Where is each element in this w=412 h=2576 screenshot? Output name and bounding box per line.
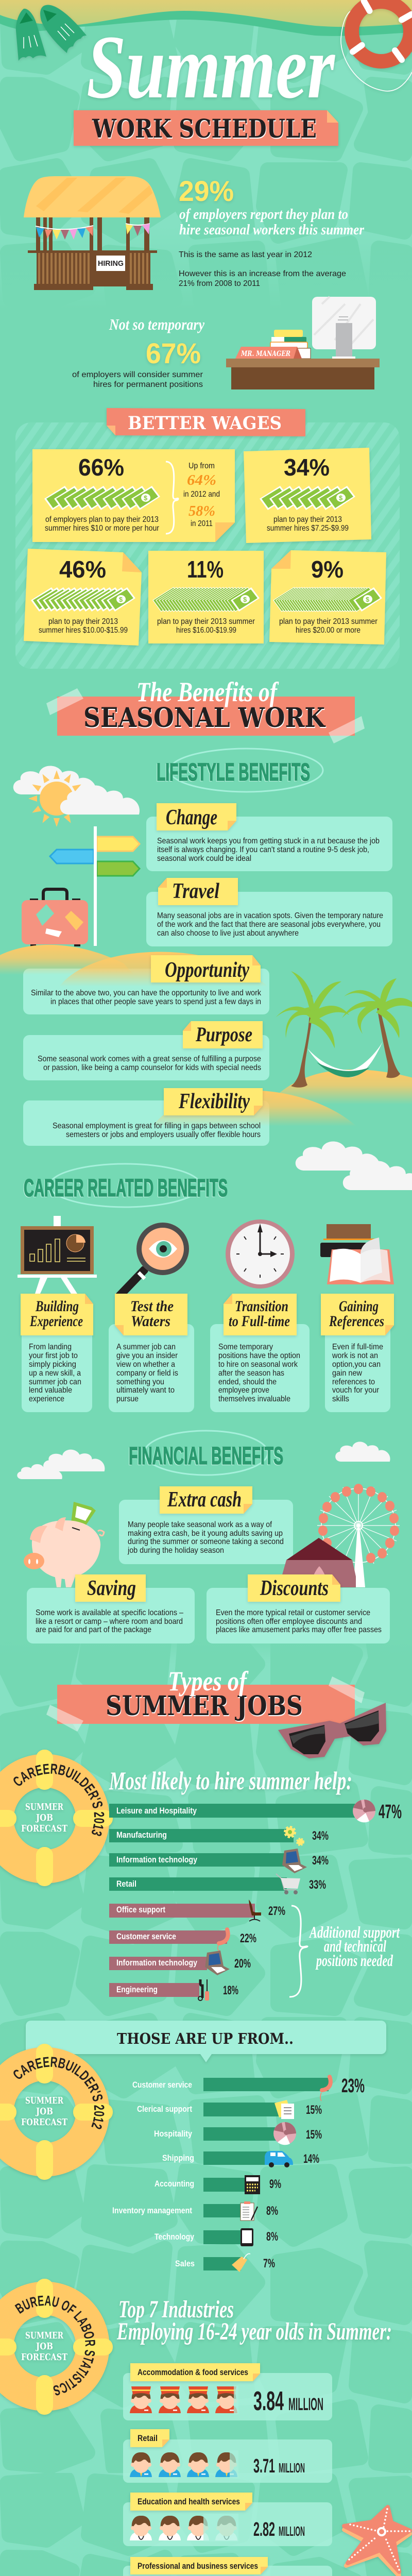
top sand shore [0, 0, 412, 36]
banner: work schedule: WORK SCHEDULE [92, 113, 317, 144]
scribble behind wages [15, 422, 400, 669]
heading: top 7 industries [116, 2296, 392, 2345]
panel: discounts [207, 1574, 390, 1643]
bar: accounting: 9% [269, 2177, 281, 2191]
panel: saving: Saving [87, 1577, 136, 1600]
stat: 29 percent: hire seasonal workers this summer [179, 222, 365, 238]
forecast ring: careerbuilder 2013: SUMMER [25, 1802, 64, 1812]
bar: technology: Technology [154, 2232, 194, 2242]
panel: travel: can also choose to live just about anywhere [157, 929, 299, 938]
panel: building experience: lend valuable [29, 1386, 72, 1395]
note: 66 percent [32, 449, 235, 542]
note: 66 percent: 64% [187, 472, 216, 488]
bar: engineering: Engineering [116, 1985, 158, 1994]
banner: types of summer jobs [46, 1666, 365, 1732]
note: 46 percent [24, 549, 142, 646]
industry: professional [123, 2557, 332, 2576]
panel: transition to full-time [210, 1294, 310, 1412]
banner: types of summer jobs: SUMMER JOBS [106, 1690, 303, 1722]
industry: education: MILLION [279, 2523, 305, 2539]
bar: sales: Sales [175, 2259, 195, 2268]
banner: types of summer jobs: Types of [168, 1666, 249, 1697]
panel: gaining references: gain new [332, 1369, 362, 1378]
bar: information technology: 34% [312, 1854, 329, 1868]
note: 66 percent: in 2012 and [183, 490, 220, 499]
industry: accommodation: Accommodation & food services [138, 2367, 248, 2377]
icon: palm trees and hammock [276, 971, 412, 1088]
note: 34 percent: 34% [284, 454, 330, 481]
icon: life ring top [341, 1, 412, 91]
industry: accommodation [123, 2363, 332, 2420]
industry: accommodation: 3.84 [253, 2386, 284, 2416]
bar: engineering: 18% [223, 1984, 238, 1997]
forecast ring: careerbuilder 2013 [0, 1750, 113, 1888]
bar: information technology [109, 1849, 329, 1873]
panel: travel [146, 878, 392, 946]
banner: benefits of seasonal work [46, 676, 365, 743]
heading: financial benefits [128, 1431, 283, 1475]
bar: inventory management: 8% [266, 2204, 278, 2218]
forecast ring: careerbuilder 2012: JOB [35, 2106, 53, 2117]
industry: retail: Retail [138, 2433, 158, 2443]
forecast ring: careerbuilder 2013: JOB [35, 1812, 53, 1823]
bar: clerical support [137, 2100, 322, 2119]
forecast ring: bureau of labor statistics: BUREAU OF LABOR STATISTICS [14, 2296, 95, 2396]
panel: discounts: Even the more typical retail or customer service [216, 1608, 370, 1617]
text: flexibility: Seasonal employment is great for filling in gaps between school [53, 1122, 261, 1130]
sand mounds lifestyle [0, 945, 412, 1126]
note: 66 percent: summer hires $10 or more per hour [45, 524, 160, 533]
bar: sales [175, 2253, 275, 2272]
money stack 11 [153, 587, 260, 612]
panel: travel: Many seasonal jobs are in vacation spots. Given the temporary nature [157, 911, 383, 920]
panel: extra cash: job during the holiday season [127, 1546, 224, 1555]
bar: technology: 8% [266, 2230, 278, 2244]
icon: circus tent [282, 1538, 356, 1587]
bar: information technology 20: 20% [234, 1957, 251, 1971]
panel: building experience: Building [35, 1298, 79, 1315]
callout: additional support [289, 1906, 400, 1997]
note: 9 percent: hires $20.00 or more [296, 626, 360, 635]
panel: transition to full-time: positions have the option [218, 1351, 300, 1360]
icon: piggy bank [24, 1502, 104, 1587]
bar: retail: Retail [116, 1879, 136, 1889]
panel: change: Change [166, 806, 217, 829]
panel: transition to full-time: Transition [235, 1298, 288, 1315]
banner: benefits of seasonal work: SEASONAL WORK [83, 702, 326, 734]
panel: test the waters [109, 1294, 194, 1412]
bar: customer service [109, 1929, 256, 1951]
panel: test the waters: A summer job can [116, 1343, 176, 1351]
icon: magnifier with eye [119, 1223, 189, 1296]
icon: flippers [16, 5, 87, 61]
text: purpose: Some seasonal work comes with a great sense of fulfilling a purpose [38, 1055, 261, 1063]
icon: books [320, 1224, 394, 1284]
bar: information technology: Information technology [116, 1855, 197, 1865]
icon: starfish [344, 2507, 410, 2576]
panel: building experience: your first job to [29, 1351, 78, 1360]
industry: education: Education and health services [138, 2497, 240, 2506]
icon: clouds right [296, 1142, 412, 1190]
forecast ring: careerbuilder 2012 [0, 2044, 113, 2181]
bar: information technology 20: Information technology [116, 1958, 197, 1968]
panel: gaining references: Even if full-time [332, 1343, 383, 1351]
forecast ring: careerbuilder 2013: FORECAST [21, 1823, 67, 1834]
panel: change [146, 803, 392, 871]
panel: gaining references: option,you can [332, 1360, 381, 1369]
note: 11 percent [148, 551, 264, 643]
heading: top 7 industries: Top 7 Industries [118, 2296, 234, 2323]
money stack 46 [31, 587, 135, 612]
stat: 67 percent not so temporary: hires for permanent positions [93, 380, 203, 389]
bar: hospitality [154, 2122, 322, 2145]
bar: accounting [154, 2175, 281, 2194]
icon: signpost [50, 826, 140, 946]
panel: change: Seasonal work keeps you from getting stuck in a rut because the job [157, 837, 380, 845]
stat: 29 percent: 21% from 2008 to 2011 [179, 279, 260, 288]
bar: customer service: Customer service [116, 1931, 176, 1941]
forecast ring: bureau of labor statistics: JOB [35, 2341, 53, 2352]
panel: gaining references: Gaining [339, 1298, 379, 1315]
banner: work schedule: WORK SCHEDULE [92, 114, 317, 145]
heading: career related benefits: CAREER RELATED BENEFITS [23, 1175, 227, 1202]
panel: transition to full-time: Some temporary [218, 1343, 273, 1351]
text: flexibility: semesters or jobs and employers usually offer flexible hours [66, 1130, 261, 1139]
icon: hiring hut [24, 176, 161, 290]
panel: extra cash: Many people take seasonal work as a way of [128, 1520, 272, 1529]
note: 46 percent: summer hires $10.00-$15.99 [39, 626, 128, 635]
panel: test the waters: something you [116, 1378, 164, 1386]
note: 46 percent: plan to pay their 2013 [48, 617, 118, 626]
stat: 29 percent: of employers report they plan to [179, 206, 348, 223]
bar: retail [109, 1874, 326, 1894]
text: flexibility: Flexibility [178, 1090, 250, 1113]
note: 9 percent [269, 550, 386, 645]
bar: sales: 7% [263, 2257, 275, 2270]
bar: customer service 23: Customer service [132, 2080, 192, 2090]
heading: career related benefits: CAREER RELATED BENEFITS [24, 1175, 228, 1202]
bar: clerical support: Clerical support [137, 2104, 192, 2114]
panel: change: seasonal work could be ideal [157, 854, 251, 863]
note: 46 percent: 46% [59, 556, 106, 583]
panel: extra cash: during the summer or someone taking a second [128, 1537, 284, 1546]
panel: building experience: From landing [29, 1343, 72, 1351]
industry: retail [123, 2429, 332, 2483]
note: 9 percent: plan to pay their 2013 summer [279, 617, 378, 626]
money stack 66 [44, 486, 160, 510]
heading: lifestyle benefits [156, 749, 323, 792]
panel: building experience: up a new skill, a [29, 1369, 81, 1378]
note: 66 percent: of employers plan to pay their 2013 [45, 515, 159, 524]
industry: retail: MILLION [279, 2460, 305, 2476]
panel: extra cash: making extra cash, be it young adults saving up [128, 1529, 283, 1538]
heading: financial benefits: FINANCIAL BENEFITS [128, 1443, 283, 1470]
note: 11 percent: hires $16.00-$19.99 [176, 626, 236, 635]
icon: chalkboard [18, 1216, 97, 1294]
panel: test the waters: pursue [116, 1395, 139, 1403]
text: purpose: or passion, like being a camp counselor for kids with special needs [43, 1063, 261, 1072]
bar: shipping: Shipping [162, 2153, 194, 2163]
icon: hiring hut: HIRING [98, 259, 124, 268]
bar: hospitality: 15% [306, 2128, 322, 2142]
text: purpose: Purpose [195, 1023, 252, 1046]
bar: inventory management: Inventory management [112, 2206, 192, 2215]
bar: customer service 23 [132, 2075, 365, 2101]
forecast ring: bureau of labor statistics: FORECAST [21, 2352, 67, 2363]
panel: transition to full-time: employee prove [218, 1386, 269, 1395]
panel: saving [27, 1574, 195, 1643]
banner: better wages: BETTER WAGES [128, 413, 282, 434]
bar: office support: Office support [116, 1905, 165, 1914]
stat: 29 percent [179, 175, 365, 288]
icon: suitcase [22, 889, 88, 946]
icon: manager desk [226, 297, 380, 389]
panel: gaining references: skills [332, 1395, 349, 1403]
panel: test the waters: view on whether a [116, 1360, 175, 1369]
banner: benefits of seasonal work: The Benefits of [136, 676, 279, 707]
bar: hospitality: Hospitality [154, 2129, 192, 2139]
panel: test the waters: company or field is [116, 1369, 178, 1378]
callout bubble: those are up from [26, 2021, 386, 2062]
title: Summer: Summer [87, 17, 335, 117]
industry: education: 2.82 [253, 2519, 275, 2540]
bar: technology [154, 2228, 278, 2246]
text: opportunity: in places that other people save years to spend just a few days in [50, 997, 261, 1006]
stat: 29 percent: 29% [179, 175, 234, 207]
text: opportunity: Similar to the above two, you can have the opportunity to live and work [31, 989, 262, 997]
money stack 34 [260, 486, 355, 510]
heading: financial benefits: FINANCIAL BENEFITS [129, 1443, 283, 1470]
money stack 9 [273, 587, 382, 612]
panel: transition to full-time: themselves invaluable [218, 1395, 290, 1403]
forecast ring: careerbuilder 2013: CAREERBUILDER'S 2013 [13, 1764, 104, 1836]
panel: discounts: places like amusement parks may offer free passes [216, 1625, 382, 1634]
bar: office support [109, 1900, 285, 1921]
banner: better wages [107, 408, 305, 436]
panel: flexibility [23, 1100, 269, 1146]
panel: saving: like a resort or camp – where room and board [36, 1617, 183, 1626]
industry: professional: Professional and business services [138, 2561, 258, 2571]
bar: manufacturing [109, 1827, 329, 1845]
industry: education [123, 2493, 332, 2546]
forecast ring: careerbuilder 2012: SUMMER [25, 2095, 64, 2106]
heading: lifestyle benefits: LIFESTYLE BENEFITS [156, 759, 310, 787]
stat: 67 percent not so temporary: of employers will consider summer [72, 370, 203, 379]
note: 34 percent [244, 448, 371, 543]
industry: accommodation: MILLION [288, 2395, 323, 2414]
industry: retail: 3.71 [253, 2455, 275, 2477]
bar: accounting: Accounting [154, 2179, 194, 2189]
panel: building experience: summer job can [29, 1378, 81, 1386]
note: 11 percent: 11% [187, 556, 224, 583]
note: 66 percent: 58% [188, 503, 215, 519]
forecast ring: careerbuilder 2012: FORECAST [21, 2117, 67, 2128]
panel: discounts: Discounts [260, 1577, 329, 1600]
bar: office support: 27% [268, 1904, 285, 1918]
text: flexibility [53, 1088, 263, 1139]
panel: gaining references: work is not an [332, 1351, 378, 1360]
callout bubble: those are up from: THOSE ARE UP FROM.. [117, 2030, 294, 2047]
bar: customer service 23: 23% [341, 2075, 365, 2097]
panel: building experience: simply picking [29, 1360, 76, 1369]
panel: test the waters: ultimately want to [116, 1386, 175, 1395]
icon: manager desk: MR. MANAGER [241, 350, 290, 358]
panel: test the waters: Waters [131, 1313, 170, 1330]
bar: engineering [109, 1979, 238, 2001]
panel: saving: are paid for and part of the package [36, 1625, 151, 1634]
bar: inventory management [112, 2201, 278, 2221]
panel: building experience [21, 1294, 93, 1412]
panel: transition to full-time: to hire on seasonal work [218, 1360, 298, 1369]
note: 66 percent: 66% [78, 454, 124, 481]
panel: transition to full-time: to Full-time [229, 1313, 290, 1330]
panel: test the waters: Test the [130, 1298, 174, 1315]
bar: retail: 33% [309, 1878, 326, 1892]
bar: clerical support: 15% [306, 2103, 322, 2117]
bar: leisure and hospitality: Leisure and Hospitality [116, 1806, 197, 1816]
panel: building experience: experience [29, 1395, 64, 1403]
panel: gaining references: references to [332, 1378, 375, 1386]
icon: clock [226, 1219, 295, 1289]
bar: manufacturing: Manufacturing [116, 1830, 167, 1840]
panel: discounts: positions often offer employee discounts and [216, 1617, 362, 1626]
forecast ring: bureau of labor statistics [0, 2279, 113, 2416]
panel: saving: Some work is available at specific locations – [36, 1608, 183, 1617]
bar: shipping: 14% [303, 2152, 319, 2166]
icon: sunglasses [278, 1703, 386, 1758]
heading: lifestyle benefits: LIFESTYLE BENEFITS [157, 759, 310, 786]
icon: sun and clouds [13, 766, 140, 827]
text: purpose [38, 1021, 263, 1072]
stat: 67 percent not so temporary [72, 315, 204, 389]
icon: clouds financial [17, 1442, 390, 1479]
forecast ring: bureau of labor statistics: SUMMER [25, 2330, 64, 2341]
banner: benefits of seasonal work: SEASONAL WORK [84, 703, 327, 735]
stat: 67 percent not so temporary: 67% [146, 337, 201, 369]
panel: transition to full-time: ended, should the [218, 1378, 277, 1386]
panel: extra cash: Extra cash [167, 1488, 242, 1512]
panel: extra cash [119, 1486, 293, 1564]
panel: building experience: Experience [29, 1313, 83, 1330]
stat: 29 percent: However this is an increase from the average [179, 269, 346, 278]
note: 11 percent: plan to pay their 2013 summer [157, 617, 255, 626]
note: 66 percent: Up from [188, 462, 215, 470]
heading: career related benefits [23, 1164, 228, 1207]
panel: change: itself is always changing. If you can't stand a routine 9-5 desk job, [157, 845, 369, 854]
note: 34 percent: plan to pay their 2013 [273, 515, 342, 524]
panel: gaining references [321, 1294, 394, 1412]
panel: opportunity [23, 969, 269, 1014]
panel: transition to full-time: after the season has [218, 1369, 284, 1378]
panel: travel: of the work and the fact that there are seasonal jobs everywhere, you [157, 920, 381, 929]
panel: gaining references: vouch for your [332, 1386, 380, 1395]
note: 9 percent: 9% [311, 556, 344, 583]
panel: purpose [23, 1035, 269, 1080]
note: 66 percent: in 2011 [191, 519, 213, 528]
panel: gaining references: References [329, 1313, 384, 1330]
stat: 67 percent not so temporary: Not so temporary [109, 315, 204, 333]
bar: leisure and hospitality [109, 1800, 402, 1823]
bar: information technology 20 [109, 1951, 251, 1975]
bar: shipping [162, 2151, 319, 2167]
bar: manufacturing: 34% [312, 1829, 329, 1843]
bar: customer service: 22% [240, 1931, 256, 1945]
stat: 29 percent: This is the same as last year in 2012 [179, 250, 312, 259]
text: opportunity [31, 955, 262, 1006]
panel: test the waters: give you an insider [116, 1351, 178, 1360]
forecast ring: careerbuilder 2012: CAREERBUILDER'S 2012 [13, 2057, 104, 2129]
text: opportunity: Opportunity [165, 958, 249, 982]
panel: travel: Travel [172, 879, 219, 903]
icon: ferris wheel [317, 1484, 400, 1587]
banner: types of summer jobs: SUMMER JOBS [106, 1691, 303, 1723]
note: 34 percent: summer hires $7.25-$9.99 [267, 524, 349, 533]
